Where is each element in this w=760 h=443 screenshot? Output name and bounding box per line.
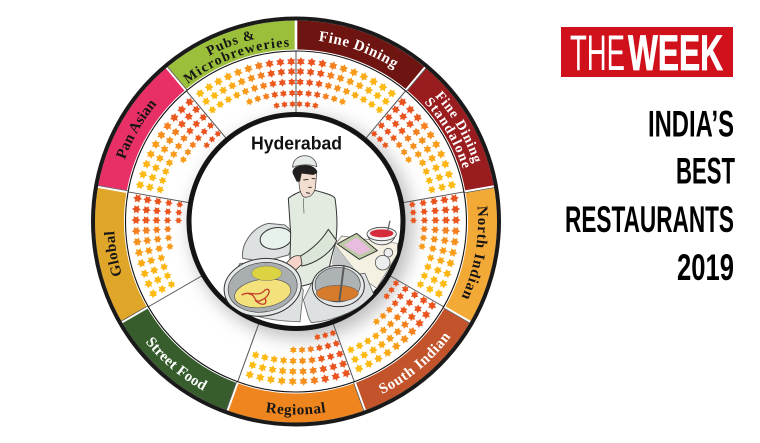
small cups xyxy=(375,248,393,270)
segment: Fine Dining Standalone xyxy=(370,68,494,194)
segment: Street Food xyxy=(122,308,236,410)
sector divider lines xyxy=(128,50,464,382)
segment: Fine Dining: Fine Dining xyxy=(318,31,398,70)
segment: Fine Dining xyxy=(296,20,424,114)
back pot xyxy=(242,222,290,260)
segment: Street Food: Street Food xyxy=(146,337,208,391)
segment: Regional: Regional xyxy=(266,402,326,418)
segment: Pan Asian xyxy=(98,68,222,194)
title: India's Best Restaurants 2019 xyxy=(565,102,735,288)
logo: THE WEEK: THE xyxy=(570,25,625,81)
segment: Pan Asian: Pan Asian xyxy=(116,101,157,160)
man xyxy=(281,156,337,287)
segment: Global: Global xyxy=(104,231,121,276)
segment: North Indian: North Indian xyxy=(462,206,488,299)
centre disc xyxy=(189,114,403,328)
segment: Global xyxy=(95,188,184,321)
soft shadow around centre disc xyxy=(191,116,413,338)
logo: THE WEEK xyxy=(561,25,733,81)
bowl of red food xyxy=(367,221,396,245)
centre illustration: Hyderabad food vendor xyxy=(220,156,397,323)
title: India's Best Restaurants 2019: 2019 xyxy=(677,246,734,288)
segment: Pubs and Microbreweries: Pubs & xyxy=(205,32,254,56)
segment: South Indian: South Indian xyxy=(379,334,451,394)
segment: North Indian xyxy=(408,188,497,321)
segment: Fine Dining Standalone: Standalone xyxy=(424,98,468,168)
inner ring base xyxy=(94,20,498,424)
segment: Fine Dining Standalone: Fine Dining xyxy=(435,90,480,164)
left pot xyxy=(220,254,305,322)
segment: Pubs and Microbreweries: Microbreweries xyxy=(182,38,289,84)
segment: Pubs and Microbreweries xyxy=(168,20,296,114)
segment: Regional xyxy=(228,330,364,422)
table xyxy=(335,236,397,288)
segment: South Indian xyxy=(346,280,470,410)
right pot xyxy=(303,265,374,323)
city name: Hyderabad: Hyderabad xyxy=(251,132,342,154)
tray of onions xyxy=(337,233,377,259)
restaurant wheel chart xyxy=(91,16,501,426)
